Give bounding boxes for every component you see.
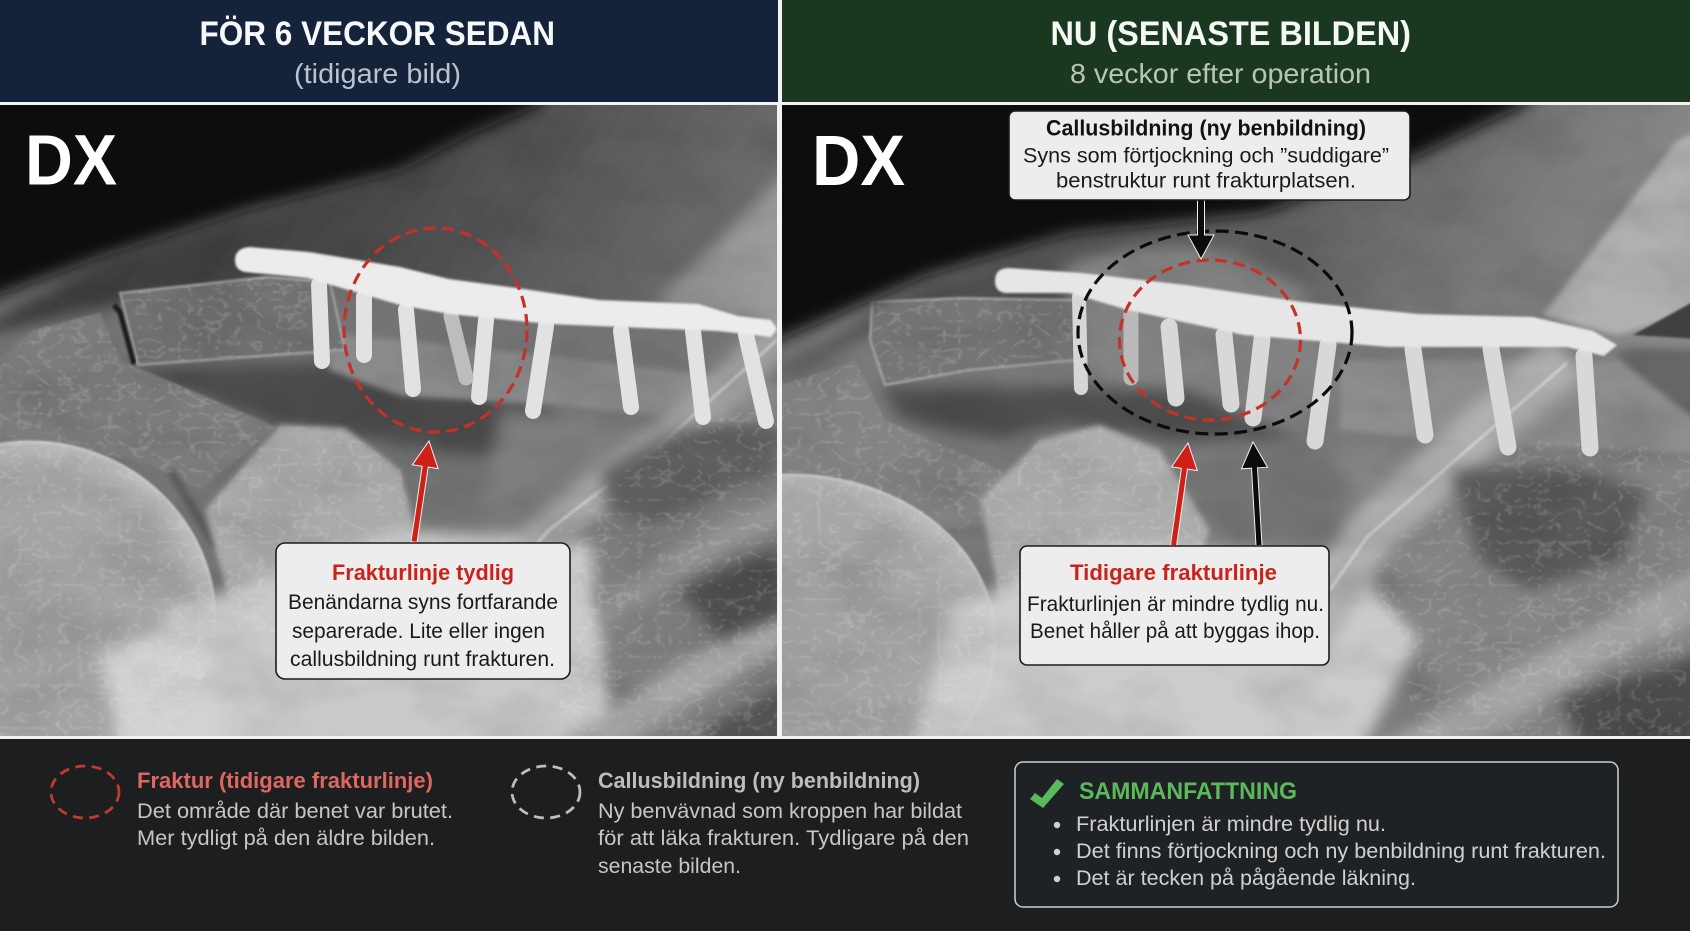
- panel: left header: [0, 0, 778, 102]
- label: DX left: DX: [25, 122, 117, 201]
- legend: callus: [512, 766, 969, 878]
- panel: right header: [782, 0, 1690, 102]
- arrow: black up: [1242, 442, 1268, 546]
- legend text: callus: Ny benvävnad som kroppen har bildat: [598, 800, 962, 823]
- arrow: red left: [411, 441, 438, 542]
- metal screws: [319, 285, 766, 421]
- callout text: Frakturlinjen är mindre tydlig nu.: [1027, 593, 1324, 616]
- legend text: fracture: Det område där benet var brutet.: [137, 800, 453, 823]
- heading: left title: FÖR 6 VECKOR SEDAN: [200, 15, 555, 53]
- metal plate: [235, 247, 777, 337]
- right subtitle: 8 veckor efter operation: [1070, 58, 1371, 89]
- callout text: Syns som förtjockning och ”suddigare”: [1023, 145, 1389, 168]
- panel: right x-ray (latest image): [782, 105, 1690, 736]
- legend icon: grey dashed circle: [512, 766, 580, 818]
- label: DX right: DX: [812, 122, 905, 201]
- legend text: callus: för att läka frakturen. Tydligare på den: [598, 827, 969, 850]
- legend heading: fracture: Fraktur (tidigare frakturlinje): [137, 768, 433, 793]
- legend icon: red dashed circle: [51, 766, 119, 818]
- metal screws: [1079, 297, 1590, 448]
- left subtitle: (tidigare bild): [294, 58, 461, 89]
- panel: footer legend: [0, 739, 1690, 931]
- arrow: black down: [1188, 200, 1214, 259]
- callout text: benstruktur runt frakturplatsen.: [1056, 170, 1356, 192]
- callout text: separerade. Lite eller ingen: [292, 620, 545, 643]
- legend: fracture: [51, 766, 453, 850]
- callout heading: Callusbildning (ny benbildning): [1046, 116, 1366, 141]
- red dashed circle: fracture right: [1120, 260, 1300, 420]
- callout heading: Tidigare frakturlinje: [1070, 560, 1277, 585]
- callout heading: Frakturlinje tydlig: [332, 560, 514, 585]
- summary bullets: [1054, 813, 1606, 890]
- callout: Frakturlinje tydlig: [276, 543, 570, 679]
- legend heading: callus: Callusbildning (ny benbildning): [598, 768, 920, 793]
- legend text: fracture: Mer tydligt på den äldre bilden.: [137, 827, 435, 850]
- summary bullets: Det är tecken på pågående läkning.: [1076, 867, 1416, 890]
- summary bullets: Frakturlinjen är mindre tydlig nu.: [1076, 813, 1386, 836]
- callout text: callusbildning runt frakturen.: [290, 648, 555, 671]
- panel: left x-ray (six weeks ago): [0, 105, 777, 736]
- red dashed circle: fracture left: [344, 228, 527, 432]
- heading: right title: NU (SENASTE BILDEN): [1050, 15, 1411, 53]
- black dashed circle: callus: [1078, 231, 1352, 434]
- callout text: Benändarna syns fortfarande: [288, 591, 558, 614]
- arrow: red right: [1170, 443, 1197, 546]
- icon: green check mark: [1030, 779, 1064, 808]
- legend text: callus: senaste bilden.: [598, 855, 741, 878]
- callout: Callusbildning: [1009, 111, 1410, 200]
- summary heading: SAMMANFATTNING: [1079, 778, 1297, 805]
- callout text: Benet håller på att byggas ihop.: [1030, 620, 1320, 643]
- metal plate: [995, 268, 1617, 356]
- callout: Tidigare frakturlinje: [1020, 546, 1329, 665]
- summary box: [1015, 762, 1618, 907]
- summary bullets: Det finns förtjockning och ny benbildning runt frakturen.: [1076, 840, 1606, 863]
